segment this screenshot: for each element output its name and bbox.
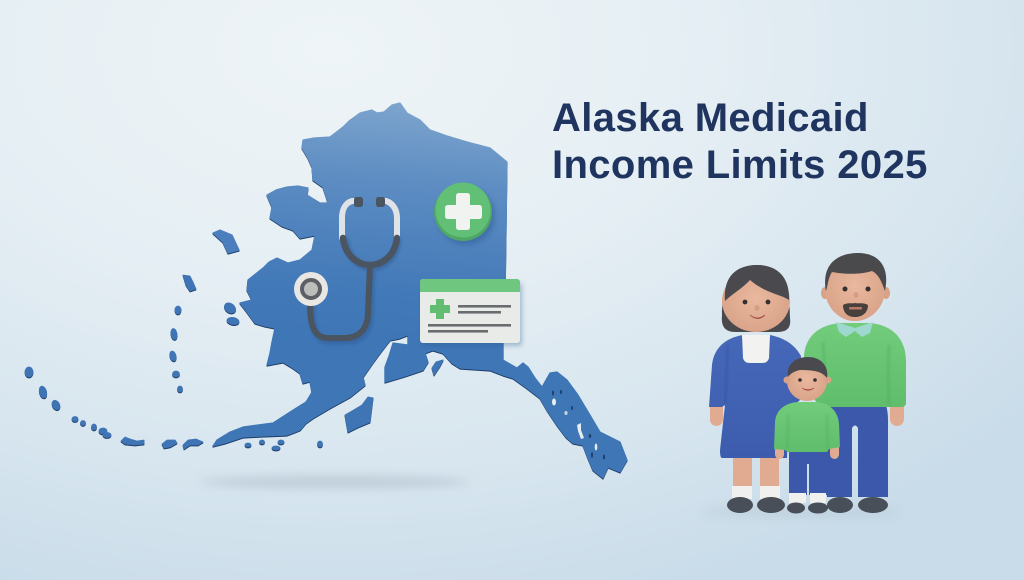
title — [552, 96, 928, 187]
map of Alaska — [25, 103, 627, 478]
icon: medical card — [420, 279, 522, 346]
family illustration — [709, 253, 906, 514]
dark Y tube — [343, 238, 397, 265]
St Lawrence island — [213, 230, 239, 253]
mother — [709, 265, 801, 513]
icon: stethoscope — [294, 197, 398, 341]
ground shadow under map — [200, 476, 470, 488]
icon: green plus badge — [434, 182, 495, 245]
title: Alaska Medicaid — [552, 96, 869, 140]
water cut-outs in the panhandle — [552, 390, 605, 460]
ear tips — [354, 197, 363, 207]
family ground shadow — [700, 508, 900, 516]
Kodiak island — [345, 397, 373, 432]
chest piece — [294, 272, 328, 306]
title: Income Limits 2025 — [552, 143, 928, 187]
father — [804, 253, 906, 513]
child — [774, 357, 840, 514]
Afognak sliver — [432, 360, 443, 375]
mainland and panhandle — [213, 103, 627, 478]
white ear tubes — [342, 201, 358, 238]
tube shadow — [312, 241, 398, 341]
Bering Sea and Aleutian islands — [25, 275, 322, 450]
sweater creases — [823, 342, 889, 404]
